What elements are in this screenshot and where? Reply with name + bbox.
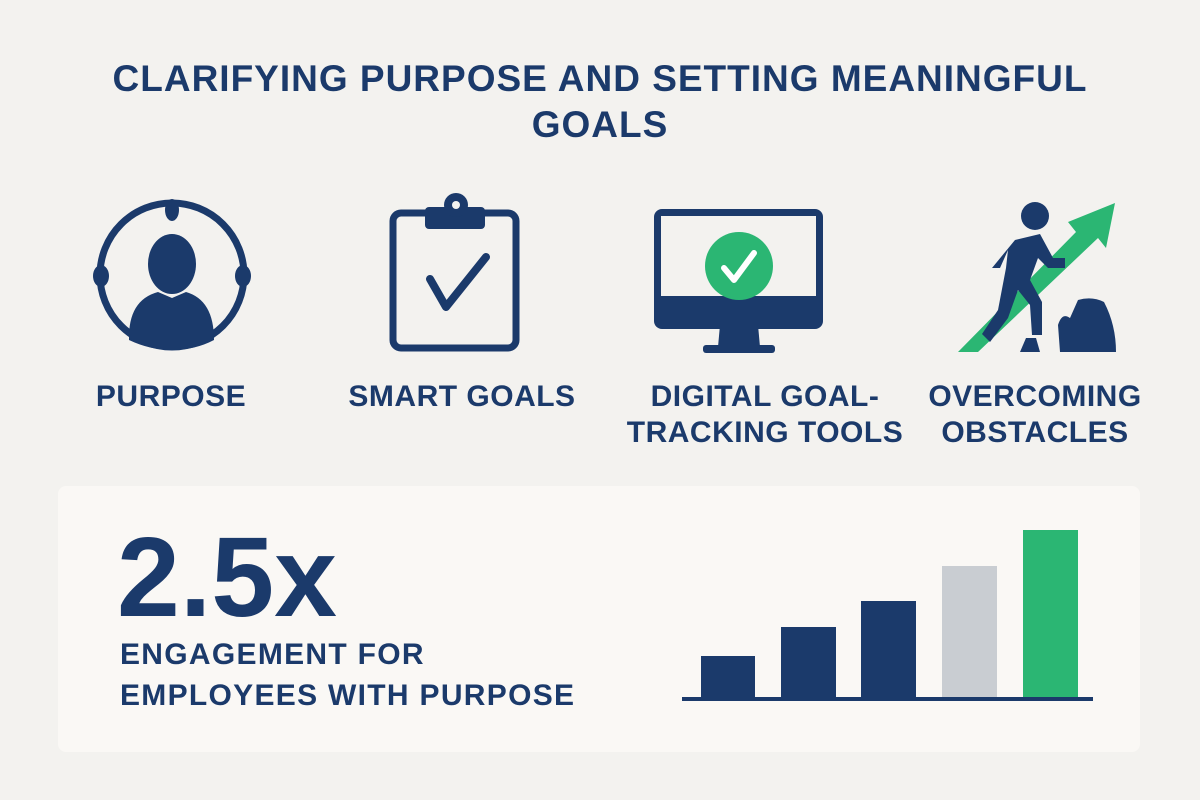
label: digital tools: DIGITAL GOAL-	[651, 380, 879, 413]
icon: monitor	[654, 209, 823, 353]
label: overcoming obstacles: OBSTACLES	[941, 416, 1129, 449]
label: digital tools: TRACKING TOOLS	[627, 416, 903, 449]
title: CLARIFYING PURPOSE AND SETTING MEANINGFUL GOALS	[113, 58, 1087, 145]
icon: purpose	[93, 199, 251, 350]
label: smart goals: SMART GOALS	[348, 380, 576, 413]
icon: climber	[958, 202, 1116, 352]
icon: clipboard	[390, 193, 520, 352]
stat caption: EMPLOYEES WITH PURPOSE	[120, 679, 575, 712]
panel: stat	[58, 486, 1140, 752]
label: purpose: PURPOSE	[96, 380, 246, 413]
stat caption: ENGAGEMENT FOR	[120, 638, 425, 671]
label: digital tools	[627, 380, 903, 449]
label: overcoming obstacles	[928, 380, 1142, 449]
label: overcoming obstacles: OVERCOMING	[928, 380, 1142, 413]
bar chart	[682, 530, 1093, 701]
stat number: 2.5x	[117, 514, 337, 640]
stat caption	[120, 638, 575, 712]
